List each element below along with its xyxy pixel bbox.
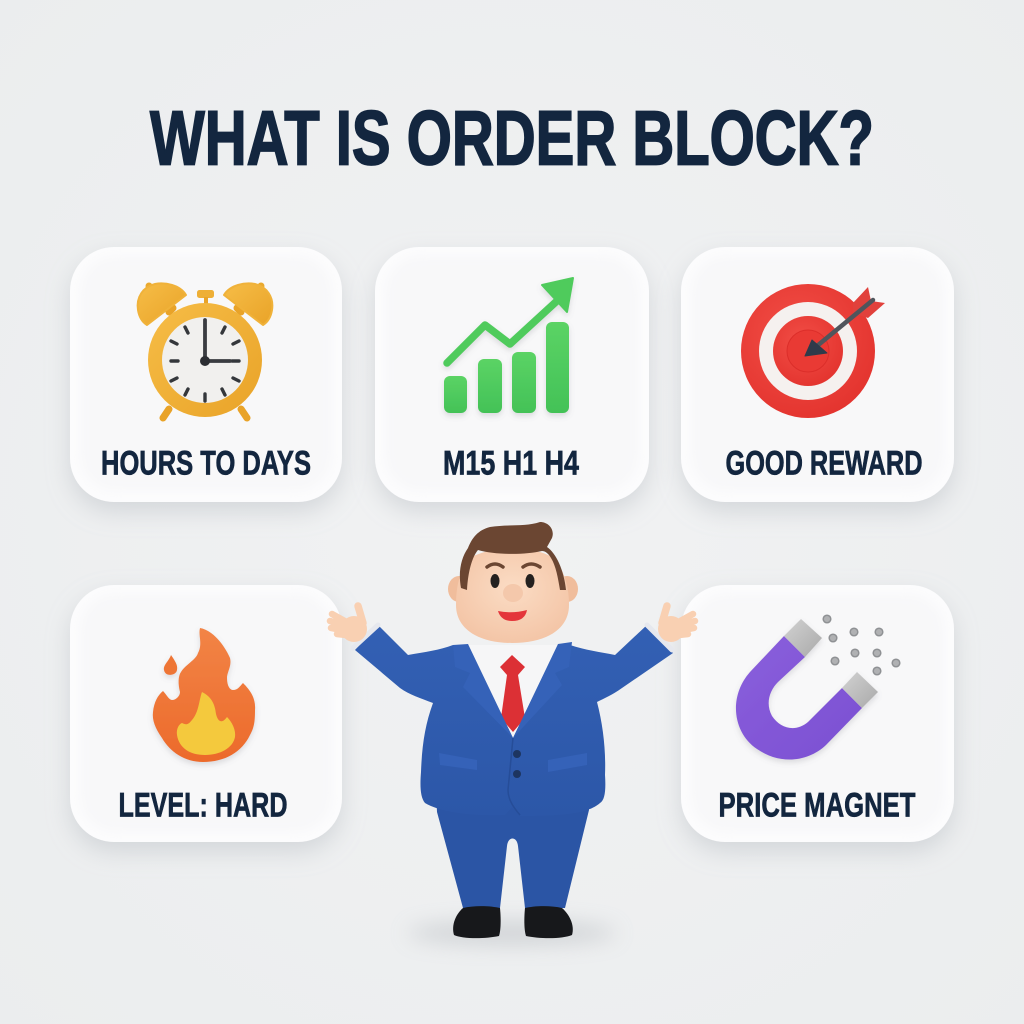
head bbox=[456, 549, 569, 643]
front seam bbox=[508, 738, 520, 815]
metal particles bbox=[823, 615, 900, 675]
ears bbox=[448, 576, 470, 602]
trousers bbox=[436, 790, 589, 908]
jacket and sleeves bbox=[355, 625, 673, 816]
pockets bbox=[439, 753, 477, 770]
cuffs bbox=[353, 625, 672, 650]
hair bbox=[460, 522, 566, 590]
panel: price magnet bbox=[681, 585, 954, 842]
shoes bbox=[453, 906, 573, 938]
left hand bbox=[330, 606, 367, 642]
icon: growth chart bbox=[444, 278, 573, 413]
label: LEVEL: HARD bbox=[118, 787, 288, 825]
eyes bbox=[490, 574, 500, 588]
shirt bbox=[466, 645, 558, 738]
icon: alarm clock bbox=[138, 282, 272, 418]
label: PRICE MAGNET bbox=[718, 787, 916, 825]
panel: hours to days bbox=[70, 247, 342, 502]
icon: magnet bbox=[736, 615, 900, 760]
label: HOURS TO DAYS bbox=[101, 445, 311, 483]
panel: timeframes bbox=[375, 247, 649, 502]
icon: target with arrow bbox=[741, 284, 885, 418]
lapels bbox=[453, 644, 513, 738]
icon: flame bbox=[153, 628, 255, 762]
nose bbox=[503, 584, 523, 602]
buttons bbox=[513, 750, 521, 758]
panel: good reward bbox=[681, 247, 954, 502]
panel: level hard bbox=[70, 585, 342, 842]
eyebrows bbox=[487, 564, 540, 567]
label: GOOD REWARD bbox=[726, 445, 922, 483]
mouth bbox=[498, 610, 527, 621]
character: businessman bbox=[330, 522, 695, 944]
tie bbox=[500, 655, 525, 732]
right hand bbox=[658, 606, 695, 642]
label: M15 H1 H4 bbox=[443, 445, 579, 483]
